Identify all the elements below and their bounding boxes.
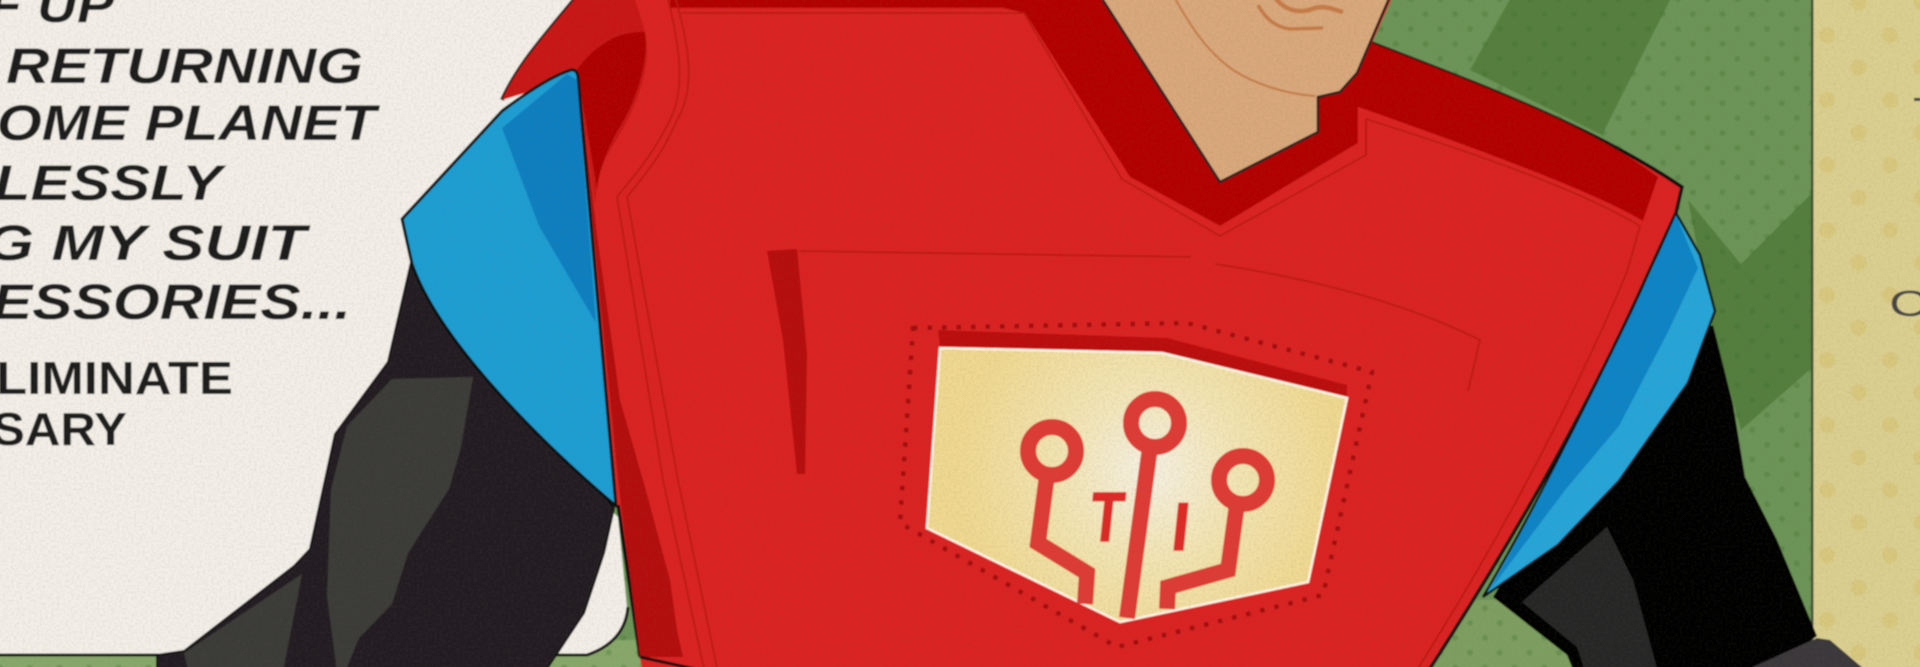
- left arm: [157, 258, 614, 667]
- speech bubble text: ESSORIES...: [0, 274, 351, 330]
- left blue shoulder cape: [402, 70, 616, 506]
- right blue shoulder cape: [1483, 213, 1715, 597]
- logo letters T and I: I: [1168, 488, 1194, 565]
- red suit torso: [502, 0, 1682, 667]
- suit seams: [617, 0, 1640, 667]
- speech bubble text: [0, 0, 381, 455]
- speech bubble text: LIMINATE: [0, 352, 233, 404]
- logo letters T and I: T: [1086, 479, 1128, 557]
- logo letters T and I: [1086, 479, 1194, 565]
- left side band: [578, 72, 683, 657]
- emblem plate: [927, 348, 1347, 622]
- suit bottom outline: [640, 657, 695, 667]
- pocket slit: [767, 249, 807, 474]
- glove cuff: [1745, 638, 1885, 667]
- caption text fragments: [1889, 82, 1920, 324]
- circuit logo: [1028, 399, 1267, 618]
- emblem stitching: [900, 323, 1372, 647]
- speech bubble: [0, 0, 628, 655]
- neck and chin skin: [1090, 0, 1397, 182]
- left shoulder shadow: [502, 0, 647, 205]
- right arm: [1493, 325, 1885, 667]
- emblem shadow: [938, 330, 1347, 400]
- right cream caption panel: [1811, 0, 1920, 667]
- chest emblem: [900, 323, 1372, 647]
- collar and right shoulder band: [670, 0, 1658, 226]
- speech bubble text: RETURNING: [6, 38, 363, 94]
